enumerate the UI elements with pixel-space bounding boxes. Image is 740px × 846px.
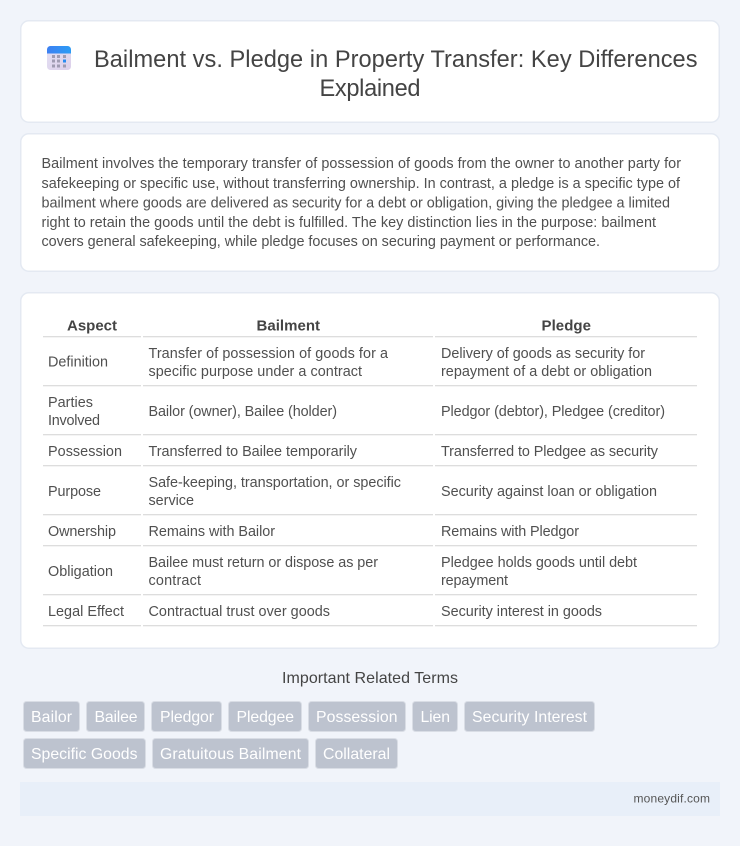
row: ownership: Remains with Bailor [148,524,275,540]
row: ownership: Remains with Pledgor [441,524,579,540]
tag: Collateral [316,738,398,768]
tag: Pledgor [152,702,222,732]
row: ownership: Ownership [48,524,116,540]
row: ownership [43,524,697,546]
text block: introduction paragraph: Bailment involves the temporary transfer of possession of goods from the owner to another party for [42,156,681,172]
title [94,47,698,102]
tag: Specific Goods: Specific Goods [31,746,138,763]
row: legal effect: Security interest in goods [441,604,602,620]
tag: Pledgor: Pledgor [160,709,214,726]
row: parties involved [43,395,697,435]
row: possession: Transferred to Bailee temporarily [148,444,358,460]
tag: Lien [412,702,458,732]
row: definition [43,346,697,386]
row: obligation [43,555,697,595]
row: parties involved: Pledgor (debtor), Pledgee (creditor) [441,404,665,420]
tag: Security Interest: Security Interest [472,709,588,726]
row: definition: Definition [48,354,108,370]
row: purpose: Security against loan or obligation [441,484,657,500]
text block: introduction paragraph: right to retain the goods until the debt is fulfilled. The key distinction lies in the purpose: bailment [42,215,656,231]
row: purpose [43,475,697,515]
row: parties involved: Bailor (owner), Bailee (holder) [148,404,337,420]
text block: introduction paragraph [42,156,681,250]
row: definition: Delivery of goods as security for [441,346,645,362]
row: purpose: Safe-keeping, transportation, or specific [148,475,401,491]
text block: introduction paragraph: covers general safekeeping, while pledge focuses on securing payment or performance. [42,234,600,250]
tag: Gratuitous Bailment: Gratuitous Bailment [160,746,302,763]
tag: Pledgee: Pledgee [236,709,294,726]
row: legal effect [43,604,697,626]
title: Explained [320,76,420,102]
row: possession: Possession [48,444,122,460]
row: parties involved: Parties [48,395,93,411]
row: obligation: repayment [441,573,508,589]
footer source: moneydif.com [634,792,710,806]
row: obligation: Pledgee holds goods until debt [441,555,637,571]
row: obligation: Obligation [48,564,113,580]
tag: Bailor: Bailor [31,709,72,726]
table header row: Pledge [542,318,591,334]
row: parties involved: Involved [48,413,100,429]
text block: introduction paragraph: bailment where goods are delivered as security for a debt or obligation, giving the pledgee a limited [42,196,670,212]
row: obligation: Bailee must return or dispose as per [148,555,378,571]
title: Bailment vs. Pledge in Property Transfer: Key Differences [94,47,698,73]
row: definition: Transfer of possession of goods for a [148,346,388,362]
tag: Bailee [86,702,144,732]
row: definition: specific purpose under a contract [148,364,362,380]
tag: Bailee: Bailee [94,709,138,726]
tag: Gratuitous Bailment [152,738,308,768]
tag: Pledgee [228,702,302,732]
panel: comparison table [21,293,719,648]
tag: Collateral: Collateral [323,746,390,763]
panel: introduction [21,134,719,271]
table header row [43,318,697,337]
row: purpose: service [148,493,194,509]
text block: introduction paragraph: safekeeping or specific use, without transferring ownership. In contrast, a pledge is a specific type of [42,176,681,192]
row: legal effect: Legal Effect [48,604,124,620]
footer bar [20,782,720,816]
icon: calendar [47,46,71,70]
row: possession [43,444,697,466]
tags: related terms [24,702,594,768]
tag: Specific Goods [24,738,146,768]
row: obligation: contract [148,573,201,589]
table header row: Aspect [67,318,117,334]
tag: Possession [308,702,406,732]
heading: important related terms: Important Related Terms [282,670,458,687]
row: purpose: Purpose [48,484,101,500]
tag: Possession: Possession [316,709,398,726]
tag: Lien: Lien [420,709,450,726]
row: definition: repayment of a debt or obligation [441,364,652,380]
tag: Bailor [24,702,80,732]
table header row: Bailment [256,318,320,334]
row: legal effect: Contractual trust over goods [148,604,330,620]
tag: Security Interest [464,702,594,732]
panel: title header [21,21,719,122]
row: possession: Transferred to Pledgee as security [441,444,659,460]
